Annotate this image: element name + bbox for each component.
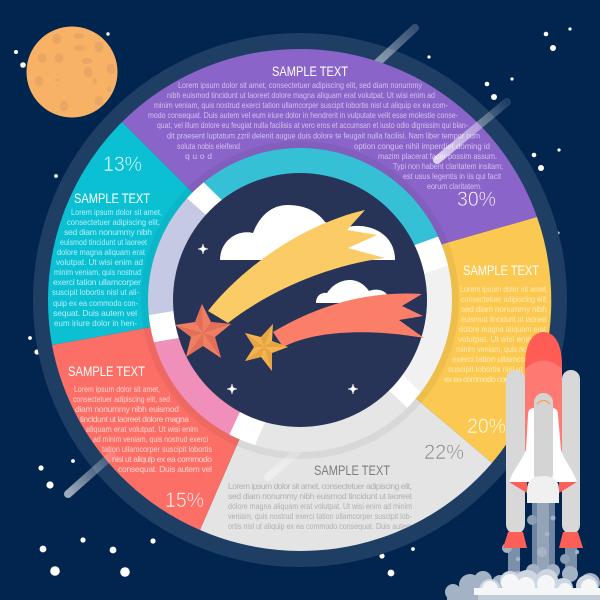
percent: 20%: 20% bbox=[467, 415, 506, 438]
text block: consectetuer adipiscing elit, sed bbox=[73, 394, 170, 404]
icon: sparkles bbox=[198, 244, 358, 394]
text block: quat, vel illum dolore eu feugiat nulla facilisis at vero eros et accumsan et iusto odio dignissim qui blan- bbox=[157, 120, 468, 130]
panel: gray text bbox=[228, 441, 464, 531]
inner circle illustration bbox=[173, 173, 427, 427]
text block: eorum claritatem. bbox=[427, 181, 482, 191]
icon: large cloud bbox=[220, 205, 395, 260]
text block: aliquam erat volutpat. Ut wisi enim bbox=[86, 424, 198, 434]
percent: 22%: 22% bbox=[424, 441, 464, 464]
text block: minim veniam, quis nostrud bbox=[456, 344, 543, 354]
text block: sed diam nonummy nibh bbox=[64, 227, 152, 237]
text block: dolore magna aliquam erat bbox=[459, 324, 547, 334]
exhaust bbox=[502, 503, 579, 578]
inner shadow ring bbox=[141, 141, 459, 459]
slice: coral bbox=[52, 300, 300, 530]
text block: ex ea commodo consequat. bbox=[444, 374, 532, 384]
text block: Typi non habent claritatem insitam; bbox=[393, 161, 503, 171]
panel: yellow text bbox=[444, 262, 548, 438]
text block bbox=[228, 481, 413, 531]
text block: dit praesent luptatum zzril delenit augue duis dolore te feugait nulla facilisi. Nam liber tempor cum bbox=[167, 130, 480, 140]
text block: consequat. Duis autem vel bbox=[118, 464, 212, 474]
text block: consectetuer adipiscing elit, bbox=[461, 294, 548, 304]
text block: exerci tation ullamcorper bbox=[53, 277, 141, 287]
text block: nibh euismod tincidunt ut laoreet dolore magna aliquam erat volutpat. Ut wisi enim ad bbox=[167, 90, 435, 100]
text block: Lorem ipsum dolor sit amet, consectetuer adipiscing elit, bbox=[228, 481, 412, 491]
heading: SAMPLE TEXT bbox=[68, 363, 145, 379]
percent: 30%: 30% bbox=[457, 188, 496, 211]
text block: Lorem ipsum dolor sit amet, consectetuer adipiscing elit, sed diam nonummy bbox=[178, 80, 423, 90]
streak: right bbox=[437, 102, 507, 160]
orbiter bbox=[509, 393, 577, 503]
streak: top bbox=[375, 28, 415, 65]
pie chart bbox=[48, 49, 551, 551]
heading: SAMPLE TEXT bbox=[74, 190, 150, 206]
text block: ortis nisl ut aliquip ex ea commodo consequat. Duis autem bbox=[228, 521, 412, 531]
text block: est usus legentis in iis qui facit bbox=[403, 171, 502, 181]
text block: sed diam nonummy nibh euismod tincidunt ut laoreet bbox=[228, 491, 413, 501]
heading: SAMPLE TEXT bbox=[463, 262, 539, 278]
percent: 15%: 15% bbox=[165, 489, 204, 512]
text block: option congue nihil imperdiet doming id bbox=[354, 141, 490, 151]
icon: coral star bbox=[175, 304, 231, 358]
text block: mazim placerat facer possim assum. bbox=[378, 151, 497, 161]
text block: quip ex ea commodo con- bbox=[53, 298, 138, 308]
icon: yellow comet tail bbox=[208, 210, 385, 323]
icon: gold star bbox=[245, 324, 288, 371]
text block: minim veniam, quis nostrud exerci tation ullamcorper suscipit lobortis nisl ut aliquip ex ea com- bbox=[154, 100, 448, 110]
text block: consectetuer adipiscing elit, bbox=[67, 217, 160, 227]
text block: tincidunt ut laoreet dolore magna bbox=[80, 414, 189, 424]
text block: exerci tation ullamcorper bbox=[452, 354, 540, 364]
text block: diam nonummy nibh euismod bbox=[75, 404, 179, 414]
panel: coral text bbox=[68, 363, 212, 512]
left booster bbox=[503, 370, 527, 548]
panel: cyan text bbox=[52, 153, 162, 328]
icon: small cloud bbox=[316, 280, 388, 303]
text block: dolore magna aliquam erat volutpat. Ut wisi enim ad minim bbox=[228, 501, 412, 511]
text block: q u o d bbox=[185, 151, 212, 161]
text block: suscipit lobortis nisl ut ali- bbox=[448, 364, 535, 374]
text block: volutpat. Ut wisi enim ad bbox=[56, 257, 143, 267]
streak: bottom bbox=[268, 436, 316, 477]
right booster bbox=[559, 370, 583, 548]
main tank bbox=[525, 332, 562, 460]
text block: tation ullamcorper suscipit lobortis bbox=[102, 444, 212, 454]
text block: Lorem ipsum dolor sit amet, bbox=[460, 284, 548, 294]
text block: soluta nobis eleifend bbox=[177, 141, 240, 151]
planet bbox=[26, 26, 118, 118]
percent: 13%: 13% bbox=[103, 153, 142, 176]
inner segmented ring bbox=[148, 148, 452, 452]
text block: euismod tincidunt ut laoreet bbox=[60, 237, 148, 247]
text block: minim veniam, quis nostrud bbox=[54, 267, 141, 277]
smoke cloud bbox=[445, 564, 600, 600]
text block bbox=[444, 284, 548, 384]
slice: gray bbox=[200, 300, 492, 551]
icon: space shuttle bbox=[445, 332, 600, 600]
text block: suscipit lobortis nisl ut ali- bbox=[52, 287, 139, 297]
text block: ad minim veniam, quis nostrud exerci bbox=[93, 434, 208, 444]
text block bbox=[73, 384, 212, 474]
slice: cyan bbox=[48, 122, 300, 345]
streak: lower left bbox=[68, 455, 112, 494]
slice: yellow bbox=[300, 217, 551, 463]
text block: sed diam nonummy nibh bbox=[461, 304, 547, 314]
text block: Lorem ipsum dolor sit amet, bbox=[71, 207, 162, 217]
icon: coral comet tail bbox=[273, 293, 424, 347]
text block: nisl ut aliquip ex ea commodo bbox=[112, 454, 212, 464]
heading: SAMPLE TEXT bbox=[314, 462, 390, 478]
text block: euismod tincidunt ut laoreet bbox=[461, 314, 548, 324]
heading: SAMPLE TEXT bbox=[272, 63, 348, 79]
text block: sequat. Duis autem vel bbox=[53, 308, 137, 318]
text block: dolore magna aliquam erat bbox=[57, 247, 146, 257]
text block: veniam, quis nostrud exerci tation ullamcorper suscipit lob- bbox=[228, 511, 412, 521]
slice: purple bbox=[122, 49, 537, 300]
text block: Lorem ipsum dolor sit amet, bbox=[74, 384, 160, 394]
text block: eum iriure dolor in hen- bbox=[54, 318, 137, 328]
text block bbox=[148, 80, 503, 191]
outer ring bbox=[33, 33, 567, 567]
text block bbox=[52, 207, 162, 328]
text block: volutpat. Ut wisi enim ad bbox=[458, 334, 545, 344]
panel: purple text bbox=[148, 63, 503, 211]
text block: modo consequat. Duis autem vel eum iriure dolor in hendrerit in vulputate velit esse molestie conse- bbox=[148, 110, 458, 120]
